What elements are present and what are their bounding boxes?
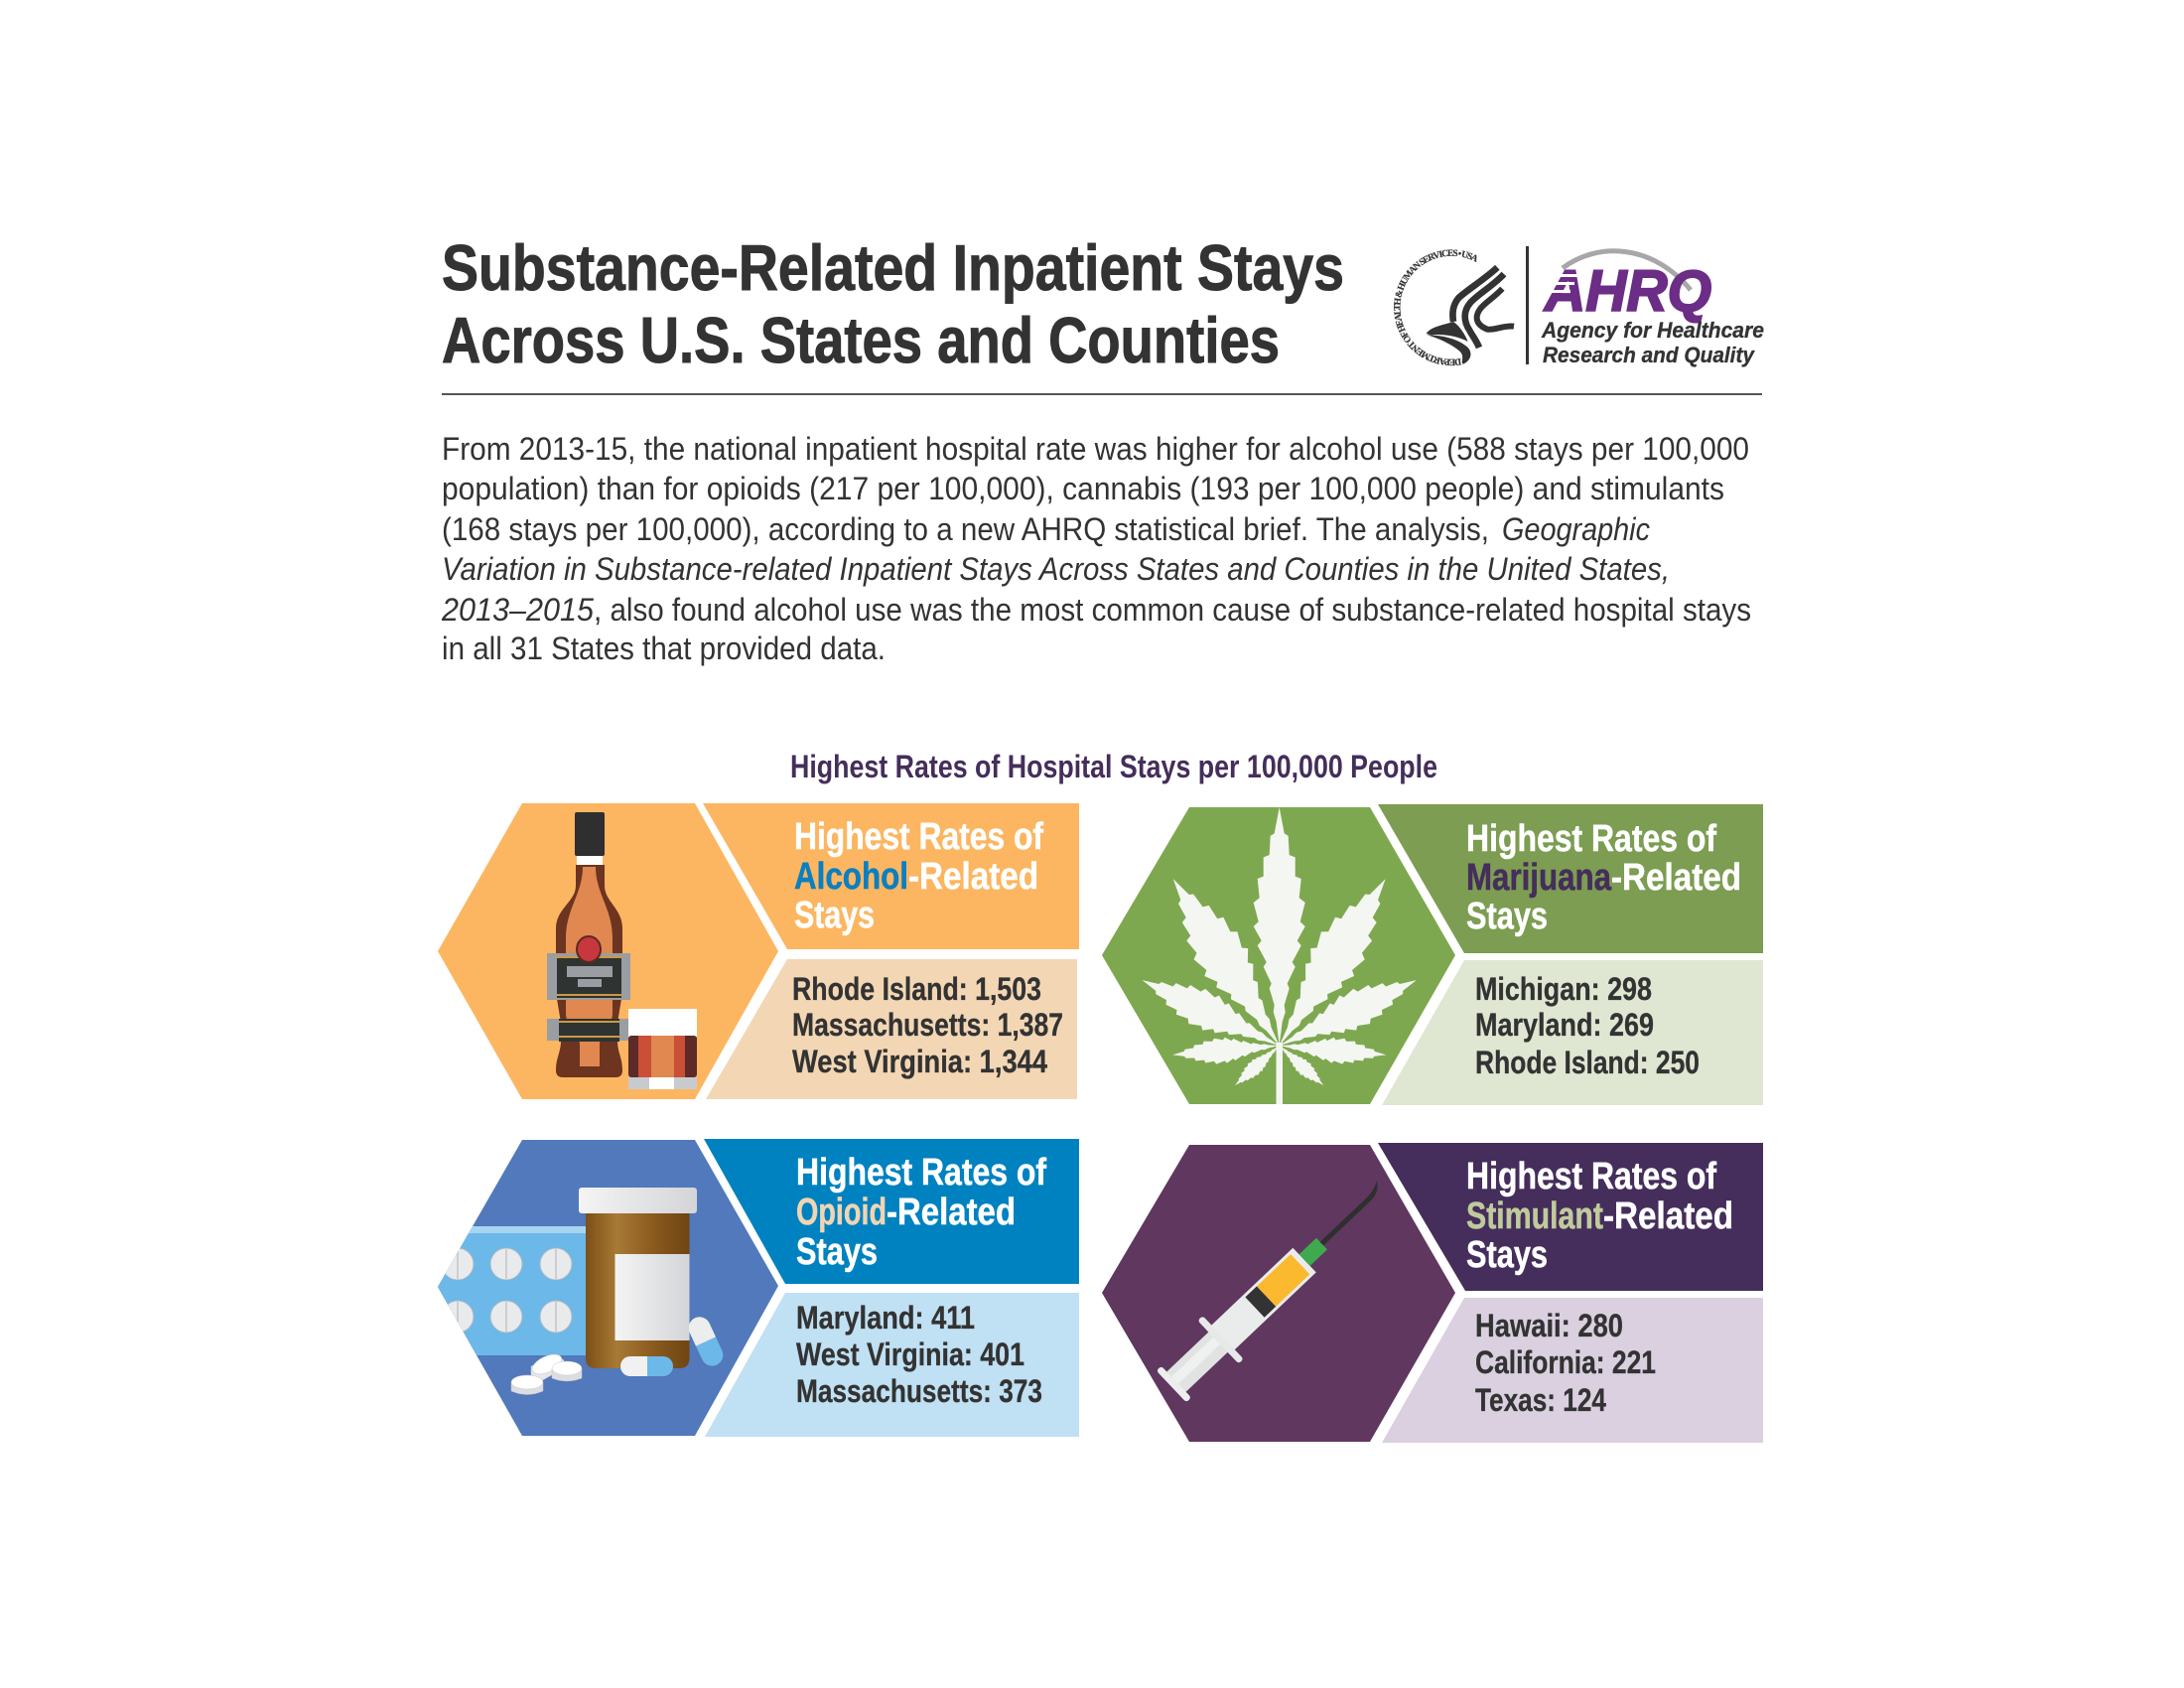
alcohol data panel — [706, 959, 1077, 1099]
intro paragraph: Variation in Substance-related Inpatient Stays Across States and Counties in the United States, — [442, 551, 1670, 587]
logo: HHS seal: DEPARTMENT OF HEALTH & HUMAN SERVICES • USA — [1394, 249, 1477, 365]
panel: opioid — [427, 1139, 1079, 1437]
alcohol heading: Alcohol — [794, 856, 908, 898]
opioid hexagon — [438, 1140, 778, 1436]
marijuana data panel — [1382, 960, 1763, 1105]
logo: AHRQ: AHRQ — [1543, 259, 1711, 324]
marijuana state rates — [1475, 971, 1700, 1080]
marijuana hexagon — [1102, 807, 1455, 1104]
opioid heading: Stays — [796, 1231, 878, 1273]
marijuana state rates: Rhode Island: 250 — [1475, 1045, 1700, 1080]
opioid state rates: West Virginia: 401 — [796, 1336, 1024, 1372]
marijuana heading: Stays — [1466, 896, 1548, 937]
opioid data panel — [705, 1293, 1079, 1437]
alcohol state rates: West Virginia: 1,344 — [792, 1044, 1047, 1079]
stimulant state rates: California: 221 — [1475, 1344, 1656, 1380]
panel: alcohol — [438, 803, 1079, 1099]
title: Substance-Related Inpatient Stays — [442, 231, 1344, 304]
opioid heading: -Related — [887, 1192, 1016, 1233]
alcohol heading: -Related — [908, 856, 1038, 898]
title: Across U.S. States and Counties — [442, 304, 1280, 376]
opioid state rates: Massachusetts: 373 — [796, 1373, 1042, 1409]
marijuana heading: Marijuana — [1466, 857, 1612, 899]
panel: stimulant — [1102, 1143, 1763, 1443]
stimulant state rates: Hawaii: 280 — [1475, 1308, 1623, 1343]
intro paragraph: population) than for opioids (217 per 100,000), cannabis (193 per 100,000 people) and stimulants — [442, 471, 1724, 506]
icon: syringe — [1151, 1165, 1403, 1408]
intro paragraph: Geographic — [1502, 511, 1650, 547]
section heading: Highest Rates of Hospital Stays per 100,000 People — [790, 749, 1437, 784]
alcohol heading — [794, 816, 1043, 936]
logo: HHS seal — [1394, 249, 1515, 365]
intro paragraph: in all 31 States that provided data. — [442, 631, 886, 666]
opioid heading: Opioid — [796, 1192, 887, 1233]
logo: AHRQ — [1541, 251, 1764, 367]
divider between logos — [1526, 246, 1529, 364]
icon: liquor bottle and glass — [547, 812, 697, 1089]
opioid heading: Highest Rates of — [796, 1152, 1046, 1194]
alcohol heading: Stays — [794, 895, 875, 936]
panel: marijuana — [1102, 804, 1763, 1105]
intro paragraph: 2013–2015 — [441, 592, 594, 628]
alcohol hexagon — [438, 803, 778, 1099]
stimulant heading: Stays — [1466, 1234, 1548, 1276]
marijuana state rates: Maryland: 269 — [1475, 1007, 1654, 1043]
stimulant state rates — [1475, 1308, 1656, 1418]
marijuana header panel — [1378, 804, 1763, 953]
marijuana heading: Highest Rates of — [1466, 818, 1716, 860]
icon: cannabis leaf — [1134, 807, 1425, 1104]
alcohol state rates: Massachusetts: 1,387 — [792, 1007, 1063, 1043]
divider rule — [442, 393, 1762, 395]
stimulant header panel — [1378, 1143, 1763, 1291]
alcohol header panel — [703, 803, 1079, 949]
title — [442, 231, 1344, 376]
marijuana heading: -Related — [1611, 857, 1741, 899]
opioid heading — [796, 1152, 1046, 1273]
opioid state rates — [796, 1300, 1042, 1409]
opioid state rates: Maryland: 411 — [796, 1300, 975, 1336]
intro paragraph: (168 stays per 100,000), according to a new AHRQ statistical brief. The analysis, — [442, 511, 1489, 547]
icon: pill bottle and pills — [427, 1188, 727, 1394]
logo: AHRQ: Research and Quality — [1543, 343, 1756, 367]
stimulant hexagon — [1102, 1145, 1455, 1442]
marijuana heading — [1466, 818, 1741, 937]
intro paragraph — [441, 431, 1751, 666]
alcohol state rates: Rhode Island: 1,503 — [792, 971, 1041, 1007]
logo: AHRQ: Agency for Healthcare — [1541, 318, 1764, 343]
stimulant heading: -Related — [1603, 1196, 1733, 1237]
alcohol heading: Highest Rates of — [794, 816, 1043, 858]
stimulant heading: Stimulant — [1466, 1196, 1603, 1237]
marijuana state rates: Michigan: 298 — [1475, 971, 1652, 1007]
stimulant state rates: Texas: 124 — [1475, 1382, 1606, 1418]
stimulant heading: Highest Rates of — [1466, 1156, 1716, 1197]
intro paragraph: From 2013-15, the national inpatient hospital rate was higher for alcohol use (588 stays per 100,000 — [442, 431, 1749, 467]
stimulant heading — [1466, 1156, 1733, 1276]
alcohol state rates — [792, 971, 1063, 1079]
intro paragraph: , also found alcohol use was the most common cause of substance-related hospital stays — [594, 592, 1751, 628]
stimulant data panel — [1382, 1298, 1763, 1443]
opioid header panel — [704, 1139, 1079, 1284]
